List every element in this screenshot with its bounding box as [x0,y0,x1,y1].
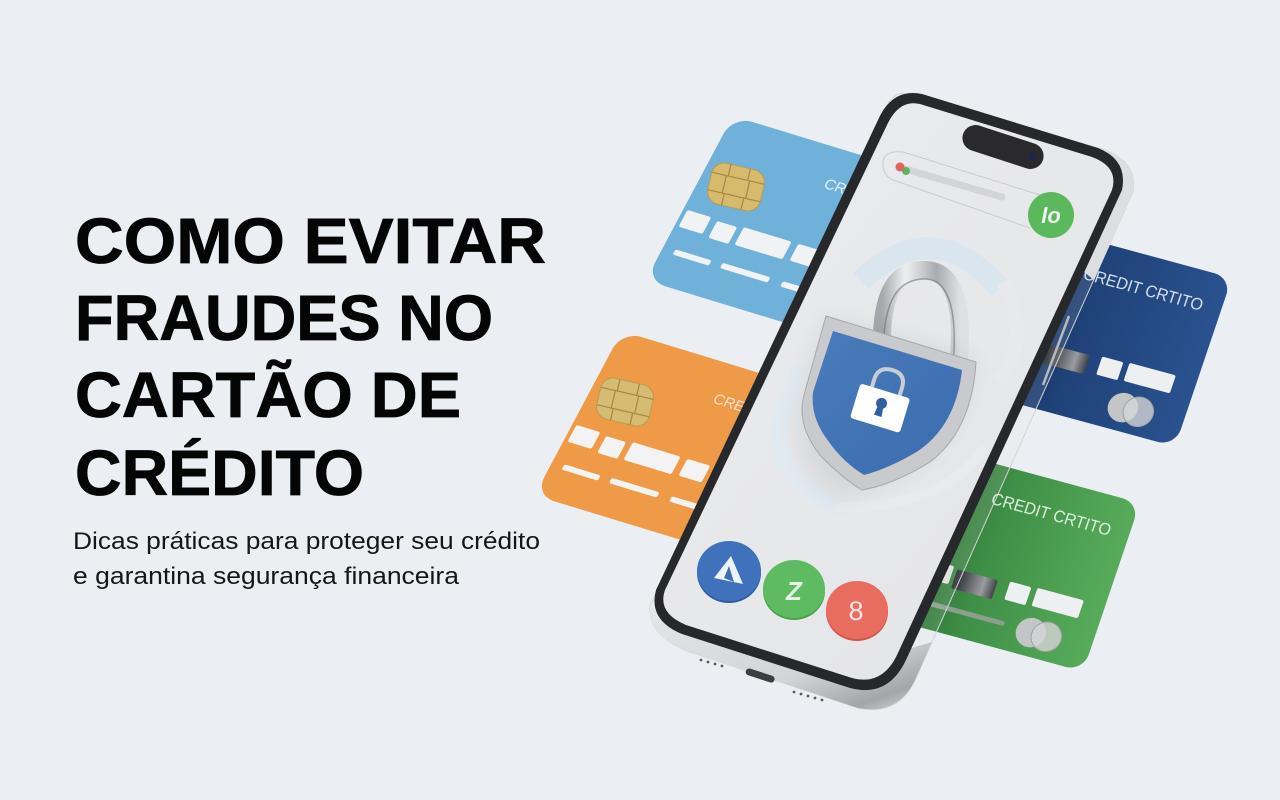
title [75,205,546,509]
card: navy [953,218,1232,447]
card: light blue: CREDIT [821,176,882,207]
subtitle: e garantina segurança financeira [73,563,460,590]
shield face [813,331,962,475]
button: blue alert [697,541,761,603]
button: red: 8 [848,596,864,626]
button: red [826,581,888,641]
title: COMO EVITAR [75,205,546,277]
chip: orange card [594,375,656,429]
card: orange [535,331,937,592]
title: FRAUDES NO [75,282,493,354]
icon: small white padlock [850,362,917,433]
security rings [779,248,1017,507]
phone metal top corner [1084,148,1134,280]
card: orange: CREDIT [710,391,771,422]
button: green [763,560,825,620]
shield [798,316,976,500]
padlock shackle [882,270,960,368]
status slider: lo [1041,203,1061,228]
title: CRÉDITO [75,437,364,509]
subtitle: Dicas práticas para proteger seu crédito [73,528,540,555]
phone ports [700,659,823,701]
card: navy: CREDIT CRTITO [1081,264,1206,315]
card: light blue [646,116,1048,377]
phone [650,93,1134,709]
button: green: Z [785,576,803,606]
chip: blue card [705,160,767,214]
card: green [861,443,1140,672]
card: green: CREDIT CRTITO [989,489,1114,540]
status slider [883,152,1074,238]
phone bezel [654,93,1123,690]
phone screen [663,103,1113,680]
phone metal base [650,606,932,709]
app buttons [697,541,888,641]
subtitle [73,528,540,590]
title: CARTÃO DE [75,359,461,431]
side button [1043,316,1069,385]
dynamic island [959,122,1047,172]
